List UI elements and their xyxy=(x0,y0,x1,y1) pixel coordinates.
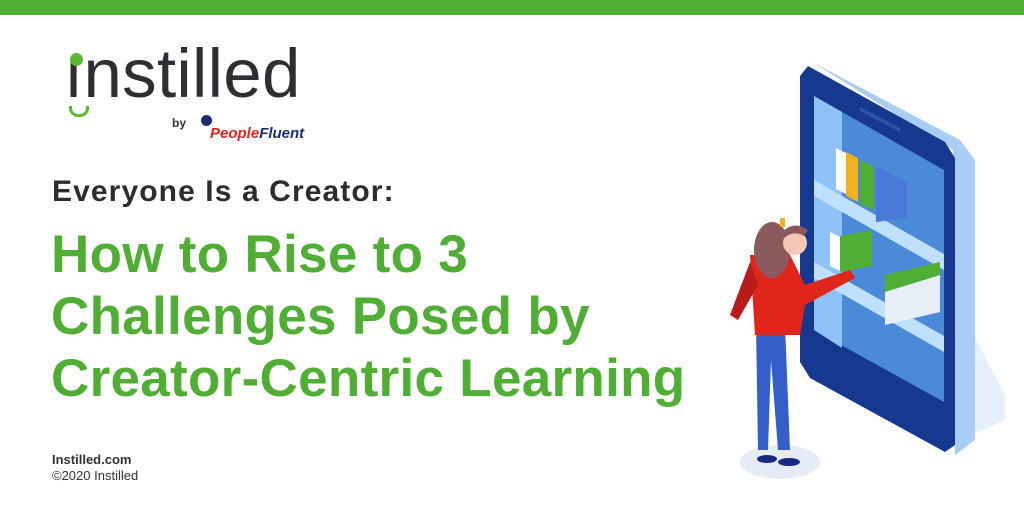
phone shadow xyxy=(955,300,1005,440)
main title xyxy=(51,225,685,408)
logo byline: by xyxy=(172,116,186,130)
main title: Challenges Posed by xyxy=(51,287,590,346)
top green bar xyxy=(0,0,1024,15)
phone body xyxy=(800,66,955,452)
main title: Creator-Centric Learning xyxy=(51,349,685,408)
footer text xyxy=(52,452,138,483)
books middle shelf xyxy=(830,230,940,325)
phone side xyxy=(812,62,975,455)
screen xyxy=(814,96,944,402)
logo xyxy=(64,35,305,142)
books top shelf xyxy=(836,148,907,222)
main title: How to Rise to 3 xyxy=(51,225,468,284)
footer text: ©2020 Instilled xyxy=(52,468,138,483)
footer text: Instilled.com xyxy=(52,452,131,467)
logo dot xyxy=(70,53,83,66)
subtitle: Everyone Is a Creator: xyxy=(52,175,395,208)
logo: PeopleFluent xyxy=(210,125,304,142)
logo i tail xyxy=(69,106,89,117)
logo wordmark: ınstilled xyxy=(64,35,301,112)
illustration: phone bookshelf and girl xyxy=(730,62,1005,479)
shelves xyxy=(814,180,944,270)
girl xyxy=(730,218,855,479)
notch xyxy=(860,107,900,132)
